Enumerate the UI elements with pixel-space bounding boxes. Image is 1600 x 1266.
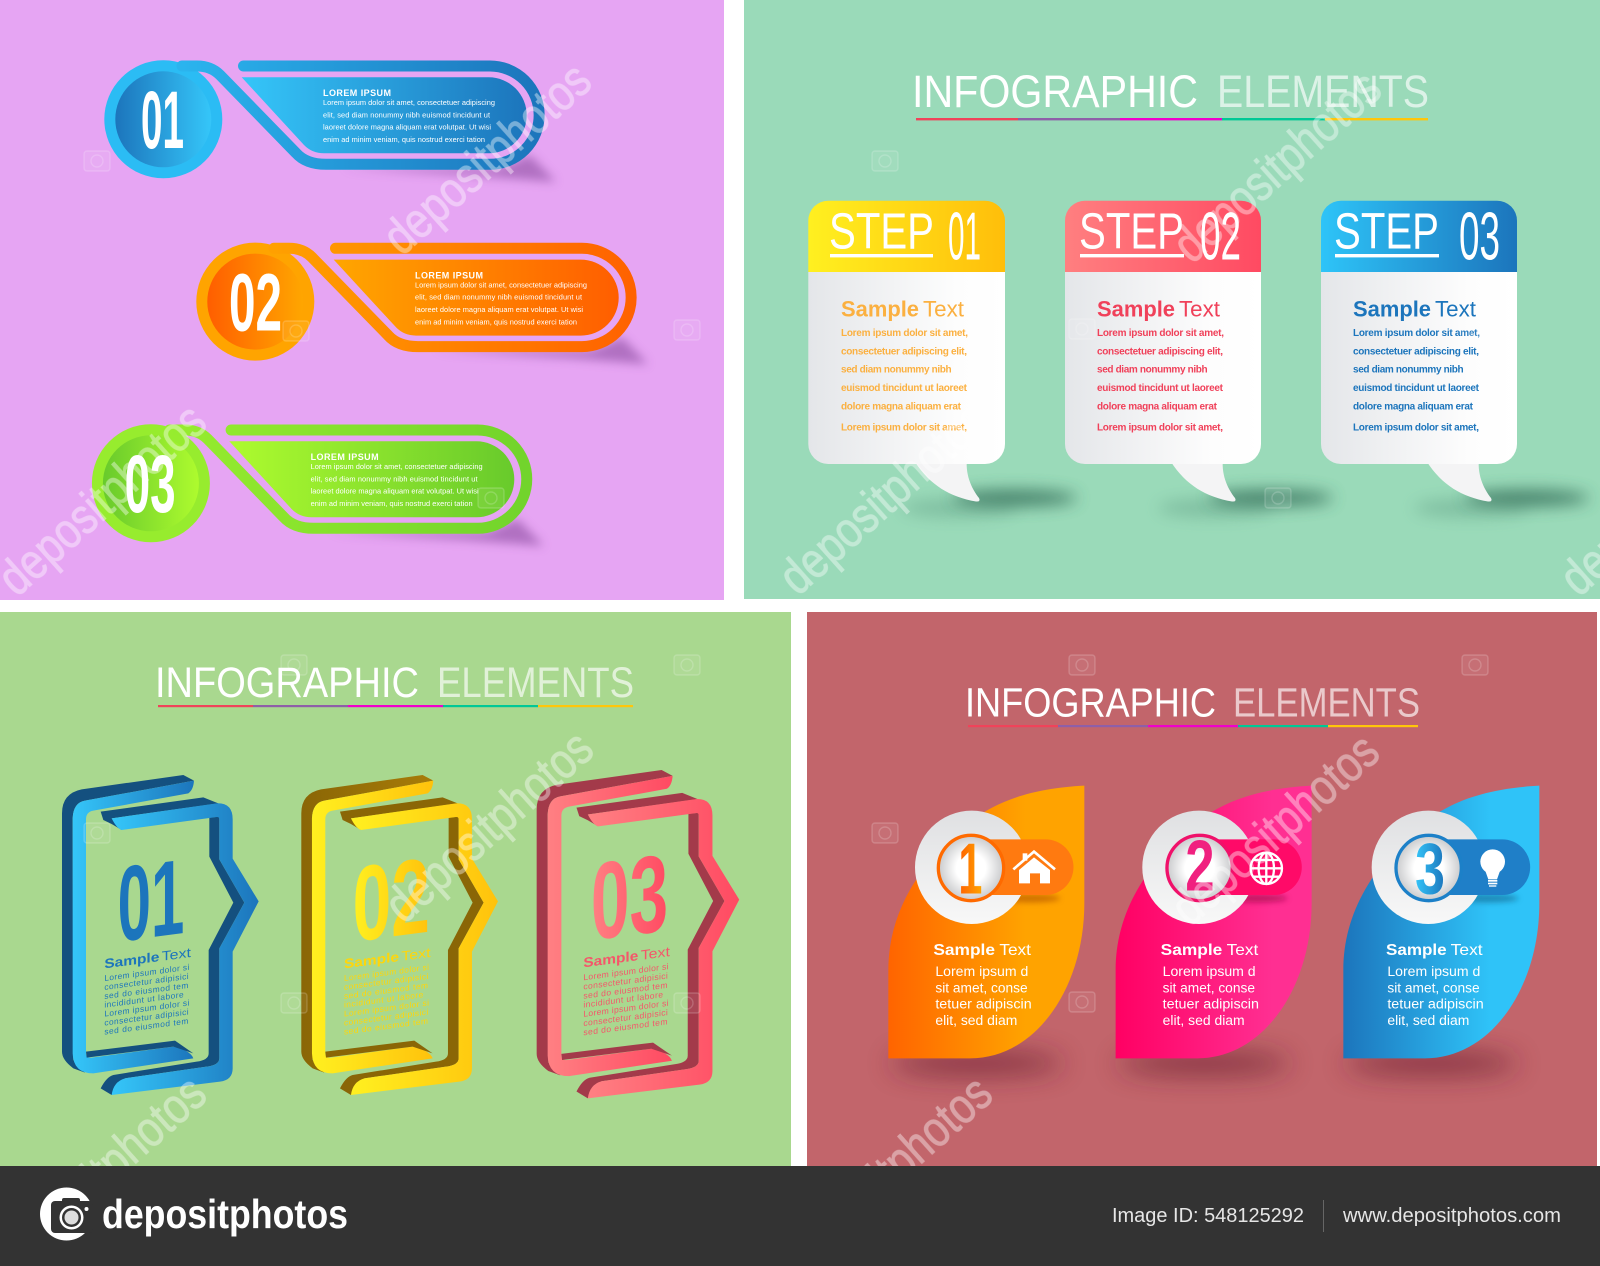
- step 02 card: euismod tincidunt ut laoreet: [1097, 383, 1224, 394]
- step 03 card: Lorem ipsum dolor sit amet,: [1353, 328, 1480, 339]
- frame 03: consectetur adipisici: [583, 1007, 668, 1028]
- frame 02: sed do eiusmod tem: [344, 1016, 428, 1037]
- leaf card 2: sit amet, conse: [1163, 980, 1255, 995]
- step 03 card: Sample: [1353, 297, 1431, 322]
- watermark: depositphotos diagonal text: depositphotos: [1162, 59, 1392, 273]
- step 03 card: dolore magna aliquam erat: [1353, 401, 1474, 412]
- frame 03: Lorem ipsum dolor si: [583, 998, 669, 1019]
- leaf card 2: Sample: [1161, 942, 1222, 959]
- frame 02: Lorem ipsum dolor si: [344, 997, 429, 1019]
- leaf card 3: Lorem ipsum d: [1387, 964, 1480, 979]
- step 03 card: euismod tincidunt ut laoreet: [1353, 383, 1480, 394]
- leaf card 2: Lorem ipsum d: [1163, 964, 1256, 979]
- panel: green 3d arrow frames: [0, 612, 791, 1166]
- title: infographic elements: ELEMENTS: [1233, 680, 1420, 726]
- banner 01: [104, 60, 556, 182]
- image id: Image ID: 548125292: [1112, 1205, 1304, 1227]
- step 03 card: STEP: [1334, 202, 1439, 259]
- panel: rose leaf cards: [807, 612, 1597, 1166]
- leaf card 3: 3: [1415, 829, 1445, 909]
- frame 02: Text: [401, 945, 431, 964]
- leaf card 1: sit amet, conse: [935, 980, 1028, 995]
- leaf card 3: Text: [1451, 942, 1483, 959]
- leaf card 3: Sample: [1386, 942, 1447, 959]
- frame 03: Text: [641, 944, 670, 963]
- frame 01: consectetur adipisici: [104, 971, 189, 992]
- banner 03: 03: [125, 439, 176, 530]
- step 03 card: Text: [1435, 297, 1476, 322]
- frame 03: [537, 770, 739, 1098]
- banner 03: enim ad minim veniam, quis nostrud exerci tation: [311, 499, 473, 508]
- banner 01: laoreet dolore magna aliquam erat volutpat. Ut wisi: [323, 123, 491, 132]
- step 02 card: STEP: [1079, 202, 1184, 259]
- frame 01: Lorem ipsum dolor si: [104, 997, 189, 1019]
- frame 02: Lorem ipsum dolor si: [344, 962, 429, 983]
- leaf card 2: [1116, 786, 1312, 1075]
- title: infographic elements: INFOGRAPHIC: [965, 680, 1216, 726]
- banner 02: enim ad minim veniam, quis nostrud exerci tation: [415, 317, 577, 326]
- leaf card 2: Text: [1227, 942, 1259, 959]
- banner 01: Lorem ipsum dolor sit amet, consectetuer adipiscing: [323, 98, 495, 107]
- frame 02: incididunt ut labore: [344, 989, 424, 1010]
- leaf card 3: tetuer adipiscin: [1387, 997, 1484, 1012]
- step 01 card: euismod tincidunt ut laoreet: [841, 383, 968, 394]
- banner 02: LOREM IPSUM: [415, 270, 483, 280]
- frame 01: incididunt ut labore: [104, 989, 184, 1010]
- title: infographic elements: ELEMENTS: [1217, 66, 1429, 117]
- frame 02: Sample: [344, 949, 399, 971]
- leaf card 1: elit, sed diam: [935, 1013, 1017, 1028]
- step 01 card: [808, 198, 1077, 517]
- leaf card 1: [888, 786, 1084, 1075]
- step 01 card: Lorem ipsum dolor sit amet,: [841, 423, 967, 434]
- watermark: depositphotos diagonal text: depositphotos: [1160, 722, 1390, 936]
- step 03 card: sed diam nonummy nibh: [1353, 365, 1464, 376]
- step 02 card: Text: [1179, 297, 1220, 322]
- frame 01: Sample: [104, 949, 159, 971]
- step 01 card: dolore magna aliquam erat: [841, 401, 962, 412]
- frame 03: 03: [591, 831, 668, 964]
- logo wordmark: depositphotos: [102, 1191, 348, 1237]
- watermark: depositphotos diagonal text: depositphotos: [372, 51, 602, 265]
- frame 01: Lorem ipsum dolor si: [104, 962, 189, 983]
- frame 01: sed do eiusmod tem: [104, 980, 188, 1001]
- banner 03: LOREM IPSUM: [311, 452, 379, 462]
- banner 01: elit, sed diam nonummy nibh euismod tincidunt ut: [323, 110, 490, 119]
- banner 02: [196, 243, 648, 364]
- leaf card 1: Lorem ipsum d: [935, 964, 1028, 979]
- banner 02: Lorem ipsum dolor sit amet, consectetuer adipiscing: [415, 280, 587, 289]
- step 01 card: 01: [948, 198, 981, 274]
- leaf card 1: tetuer adipiscin: [935, 997, 1032, 1012]
- banner 01: enim ad minim veniam, quis nostrud exerci tation: [323, 135, 485, 144]
- title: infographic elements: ELEMENTS: [437, 659, 634, 707]
- step 01 card: STEP: [829, 202, 934, 259]
- step 02 card: Lorem ipsum dolor sit amet,: [1097, 328, 1224, 339]
- title: infographic elements: INFOGRAPHIC: [912, 66, 1198, 117]
- icon: light bulb: [1480, 849, 1505, 887]
- banner 03: [92, 424, 544, 546]
- watermark: depositphotos diagonal text: depositphotos: [768, 391, 998, 605]
- banner 03: Lorem ipsum dolor sit amet, consectetuer adipiscing: [311, 462, 483, 471]
- step 01 card: Text: [923, 297, 964, 322]
- step 02 card: consectetuer adipiscing elit,: [1097, 346, 1223, 357]
- title: infographic elements: [155, 659, 634, 707]
- step 01 card: sed diam nonummy nibh: [841, 365, 952, 376]
- step 02 card: dolore magna aliquam erat: [1097, 401, 1218, 412]
- footer bar: [0, 1166, 1600, 1266]
- banner 03: elit, sed diam nonummy nibh euismod tincidunt ut: [311, 474, 478, 483]
- frame 01: sed do eiusmod tem: [104, 1016, 188, 1037]
- step 02 card: [1065, 198, 1333, 517]
- leaf card 2: elit, sed diam: [1163, 1013, 1245, 1028]
- step 03 card: 03: [1459, 198, 1500, 274]
- leaf card 3: elit, sed diam: [1387, 1013, 1469, 1028]
- leaf card 1: Text: [999, 942, 1032, 959]
- frame 03: Lorem ipsum dolor si: [583, 961, 669, 982]
- banner 03: laoreet dolore magna aliquam erat volutpat. Ut wisi: [311, 487, 479, 496]
- website url: www.depositphotos.com: [1342, 1205, 1561, 1227]
- icon: house: [1013, 852, 1055, 883]
- frame 03: incididunt ut labore: [583, 989, 663, 1010]
- frame 02: consectetur adipisici: [344, 1007, 428, 1028]
- title: infographic elements: INFOGRAPHIC: [155, 659, 419, 707]
- step 01 card: consectetuer adipiscing elit,: [841, 346, 967, 357]
- step 02 card: 02: [1200, 198, 1241, 274]
- leaf card 1: 1: [958, 829, 982, 909]
- frame 03: Sample: [583, 948, 639, 970]
- leaf card 1: Sample: [933, 942, 995, 959]
- step 01 card: Sample: [841, 297, 919, 322]
- frame 02: consectetur adipisici: [344, 971, 428, 992]
- leaf card 2: 2: [1185, 827, 1215, 907]
- step 02 card: sed diam nonummy nibh: [1097, 365, 1208, 376]
- step 03 card: Lorem ipsum dolor sit amet,: [1353, 423, 1479, 434]
- banner 01: 01: [141, 75, 184, 166]
- title: infographic elements: [965, 680, 1420, 727]
- leaf card 3: [1343, 786, 1539, 1075]
- banner 02: 02: [229, 257, 282, 348]
- icon: depositphotos camera logo: [40, 1188, 93, 1240]
- frame 02: sed do eiusmod tem: [344, 980, 428, 1001]
- frame 01: consectetur adipisici: [104, 1007, 189, 1028]
- frame 01: 01: [118, 836, 184, 965]
- step 01 card: Lorem ipsum dolor sit amet,: [841, 328, 968, 339]
- watermark: depositphotos diagonal text: depositphotos: [374, 719, 604, 933]
- leaf card 2: tetuer adipiscin: [1163, 997, 1259, 1012]
- step 03 card: consectetuer adipiscing elit,: [1353, 346, 1479, 357]
- frame 01: [62, 775, 259, 1095]
- banner 02: laoreet dolore magna aliquam erat volutpat. Ut wisi: [415, 305, 583, 314]
- frame 03: sed do eiusmod tem: [583, 1016, 667, 1037]
- step 02 card: Lorem ipsum dolor sit amet,: [1097, 423, 1223, 434]
- frame 02: 02: [353, 835, 430, 965]
- step 02 card: Sample: [1097, 297, 1175, 322]
- banner 02: elit, sed diam nonummy nibh euismod tincidunt ut: [415, 293, 582, 302]
- frame 01: Text: [162, 945, 191, 964]
- frame 02: [301, 775, 498, 1095]
- banner 01: LOREM IPSUM: [323, 88, 391, 98]
- icon: globe: [1251, 853, 1282, 884]
- panel: purple horizontal banners: [0, 0, 724, 600]
- title: infographic elements: [912, 66, 1429, 120]
- panel: green speech bubble steps: [744, 0, 1600, 599]
- watermark: camera marks: [84, 151, 1488, 1013]
- frame 03: consectetur adipisici: [583, 971, 668, 992]
- leaf card 3: sit amet, conse: [1387, 980, 1480, 995]
- frame 03: sed do eiusmod tem: [583, 980, 667, 1001]
- step 03 card: [1321, 198, 1589, 517]
